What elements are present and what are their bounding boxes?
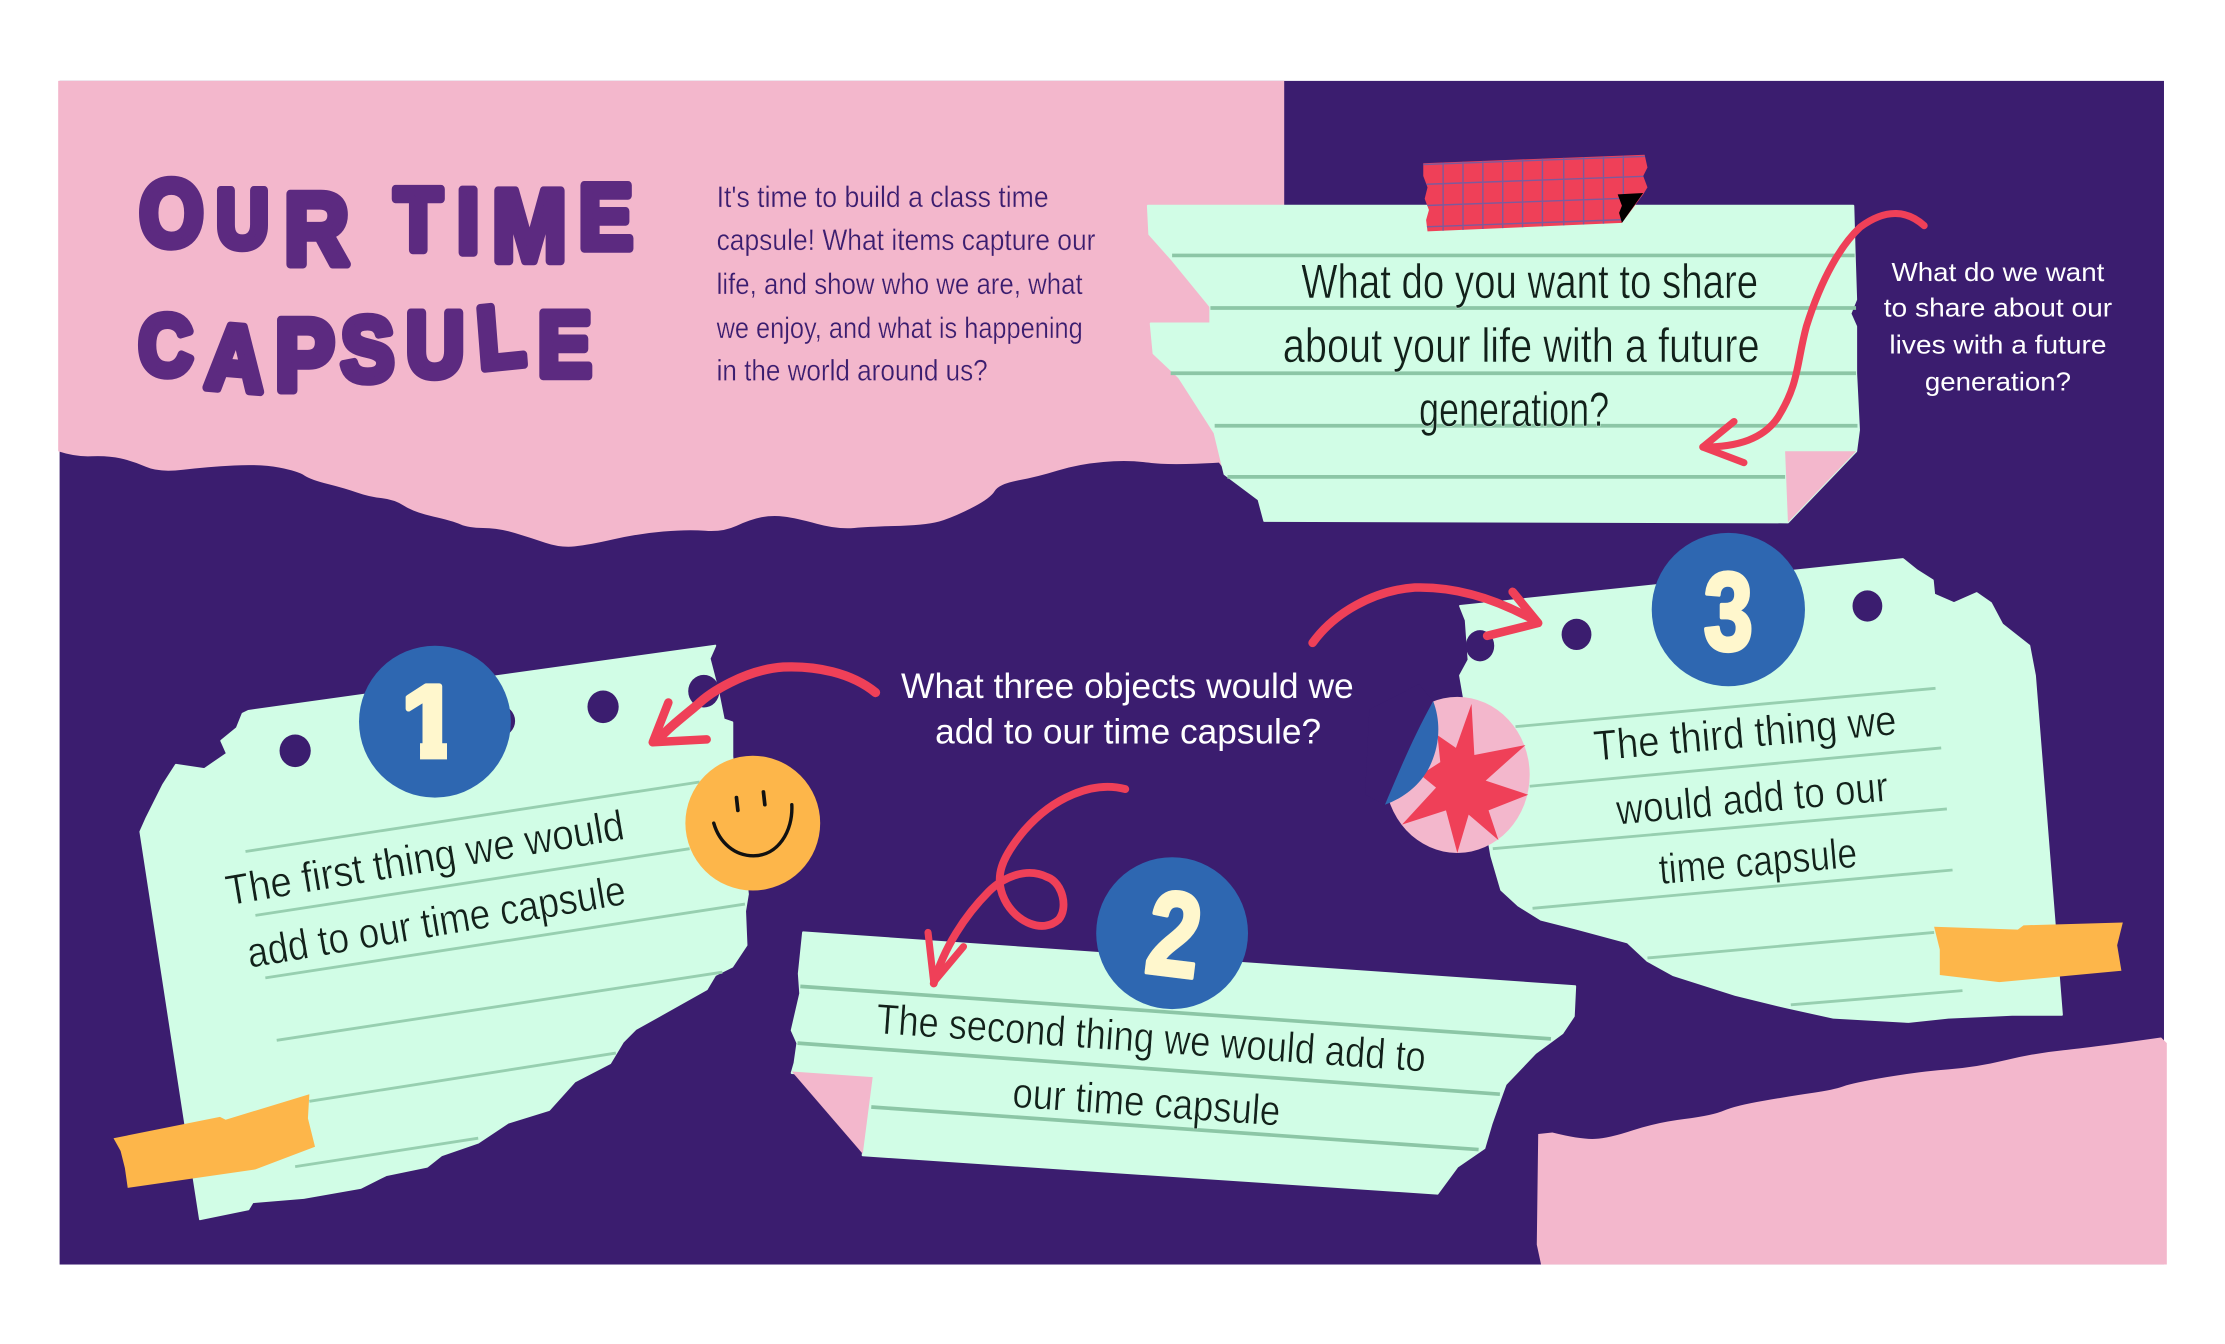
- text: three objects question: What three objects would we: [901, 668, 1354, 706]
- intro paragraph: [716, 181, 1096, 387]
- text: third thing: [1592, 696, 1898, 894]
- question text: What do you want to share: [1301, 255, 1758, 309]
- text: first thing: [222, 801, 629, 978]
- panel: note 2: [792, 932, 1575, 1194]
- title: R: [284, 173, 349, 286]
- text: share question: lives with a future: [1889, 329, 2107, 359]
- panel: note 3: [1460, 559, 2062, 1022]
- title: M: [492, 170, 567, 283]
- text: second thing: our time capsule: [1011, 1069, 1282, 1136]
- badge: number 2: [1096, 857, 1248, 1009]
- badge: number 3: 3: [1704, 551, 1753, 674]
- text: second thing: [875, 995, 1427, 1136]
- text: second thing: The second thing we would add to: [875, 995, 1427, 1082]
- badge: number 3: [1652, 533, 1805, 686]
- intro paragraph: in the world around us?: [717, 354, 988, 387]
- title: U: [216, 174, 269, 265]
- title: E: [579, 166, 633, 269]
- title: A: [203, 305, 268, 412]
- intro paragraph: we enjoy, and what is happening: [716, 312, 1083, 345]
- text: first thing: The first thing we would: [222, 801, 628, 915]
- question text: generation?: [1419, 383, 1609, 437]
- intro paragraph: capsule! What items capture our: [717, 224, 1096, 257]
- icon: smiley sticker: [685, 756, 820, 891]
- text: share question: [1884, 257, 2112, 396]
- title: L: [473, 285, 528, 388]
- title: I: [457, 172, 479, 273]
- torn pink header panel: [58, 81, 1284, 547]
- panel: share note: [1148, 206, 1859, 522]
- star sticker: [1365, 684, 1530, 853]
- title: S: [341, 300, 394, 401]
- title: U: [406, 293, 464, 396]
- orange tape: [1934, 922, 2123, 982]
- question text: about your life with a future: [1283, 319, 1760, 373]
- intro paragraph: It's time to build a class time: [717, 181, 1049, 214]
- arrow: question to share note: [1703, 214, 1924, 463]
- arrow: centre to note 2: [928, 787, 1125, 984]
- text: third thing: would add to our: [1613, 763, 1890, 835]
- title: T: [395, 170, 442, 269]
- arrow: centre to note 1: [653, 667, 876, 742]
- badge: number 1: [359, 646, 511, 798]
- text: share question: What do we want: [1892, 257, 2105, 287]
- folded corner: [1785, 451, 1856, 522]
- title: [139, 161, 633, 413]
- panel: note 1: [140, 646, 748, 1219]
- text: first thing: add to our time capsule: [243, 867, 629, 978]
- title: O: [139, 161, 203, 266]
- orange tape: [114, 1094, 315, 1188]
- text: three objects question: add to our time capsule?: [935, 714, 1321, 752]
- text: three objects question: [901, 668, 1354, 752]
- torn pink corner panel: [1537, 1037, 2167, 1265]
- arrow: centre to note 3: [1313, 587, 1538, 643]
- badge: number 2: 2: [1140, 864, 1209, 1003]
- folded corner: [792, 1072, 873, 1154]
- badge: number 1: 1: [402, 664, 458, 778]
- text: third thing: The third thing we: [1592, 696, 1898, 771]
- text: third thing: time capsule: [1657, 829, 1859, 894]
- text: share question: generation?: [1925, 366, 2071, 396]
- intro paragraph: life, and show who we are, what: [717, 268, 1083, 301]
- red grid tape: [1423, 154, 1648, 232]
- text: share question: to share about our: [1884, 292, 2112, 322]
- title: E: [538, 293, 592, 396]
- question text: [1283, 255, 1760, 437]
- title: C: [139, 297, 193, 393]
- title: P: [275, 299, 335, 413]
